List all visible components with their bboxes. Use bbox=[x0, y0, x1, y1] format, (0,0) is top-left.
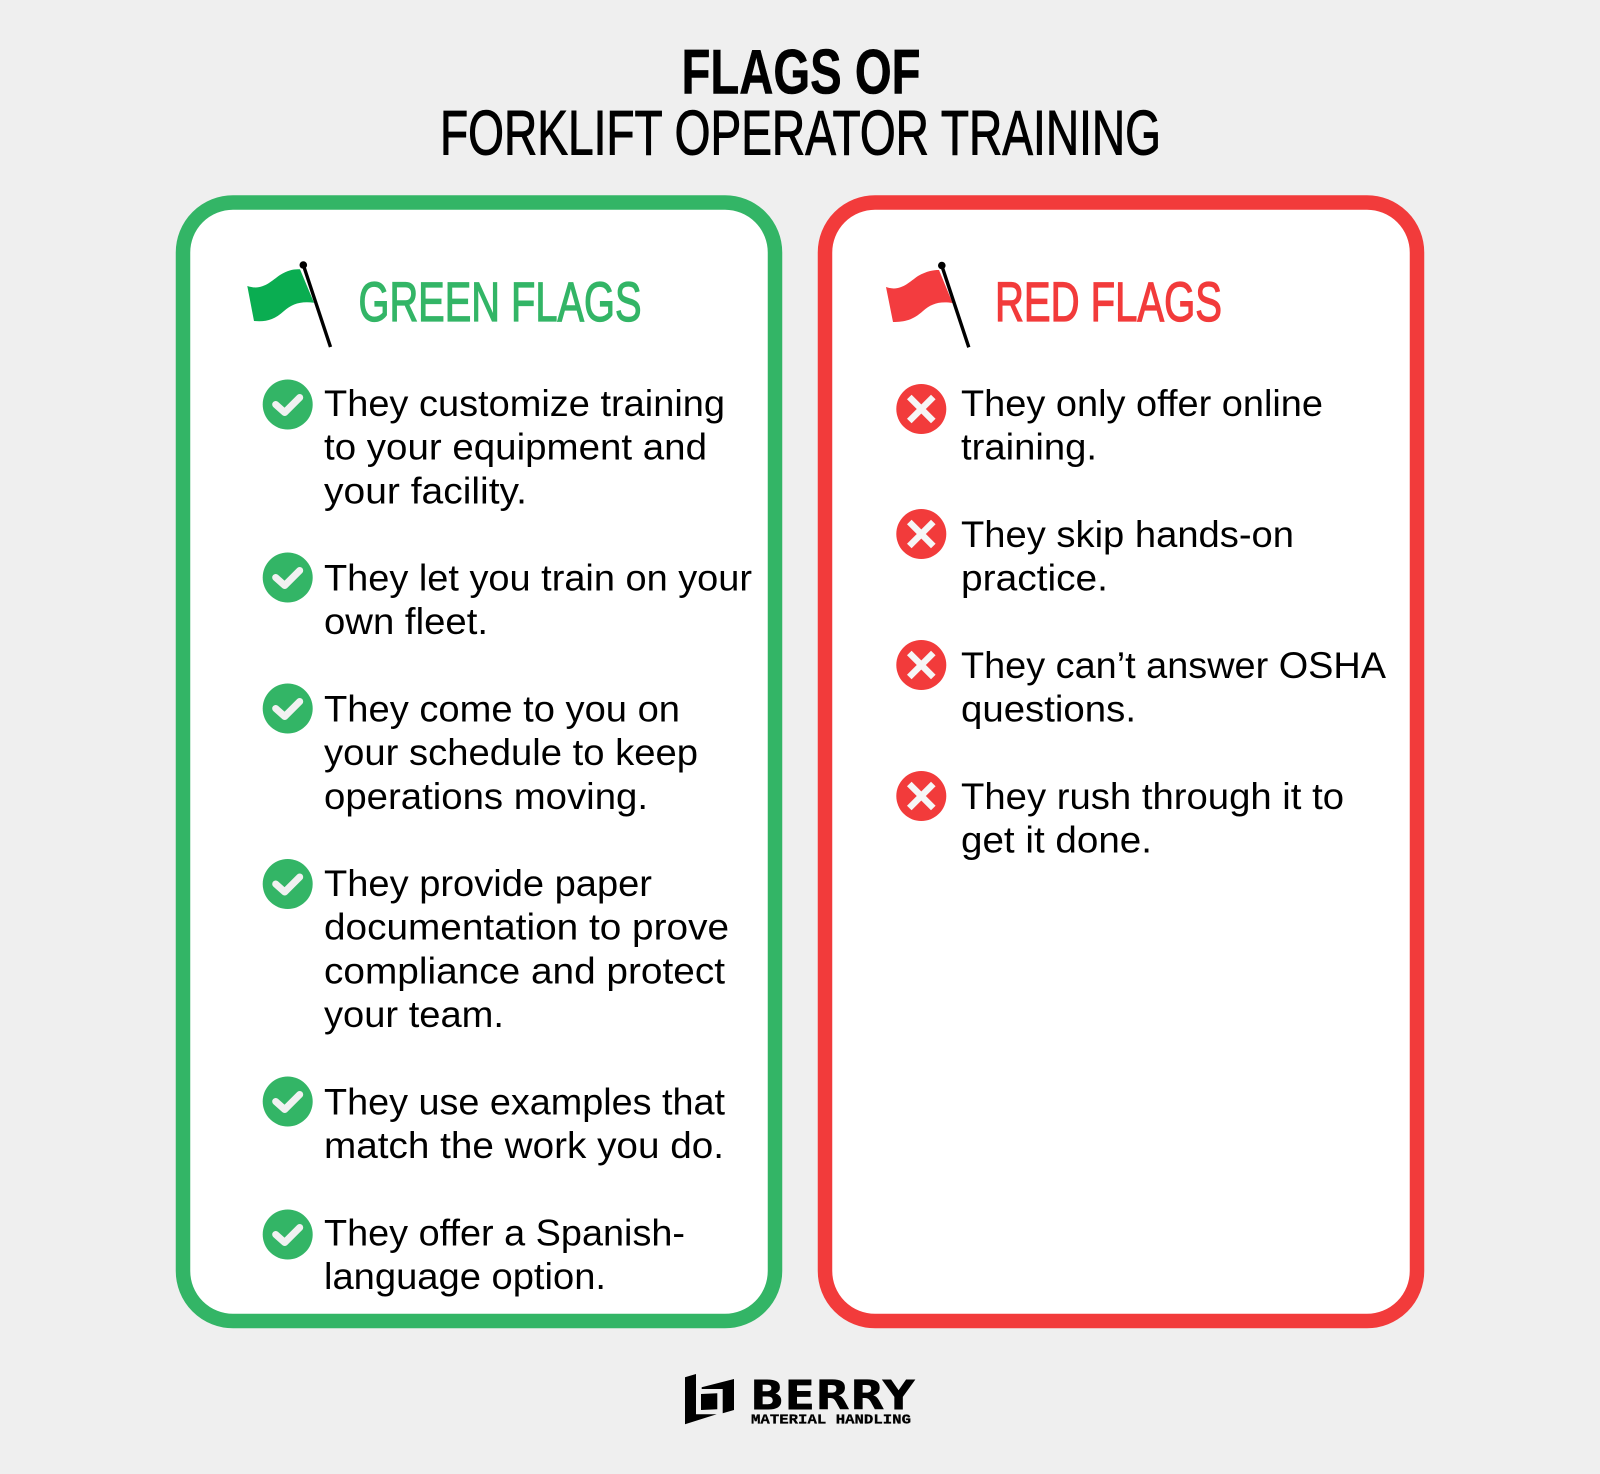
item: on your schedule bbox=[263, 684, 698, 817]
item: on your schedule: your schedule to keep bbox=[324, 732, 698, 773]
logo: Berry Material Handling: BERRY bbox=[750, 1371, 916, 1419]
panel: green flags bbox=[183, 202, 775, 1321]
item: hands-on: They skip hands-on bbox=[961, 514, 1294, 555]
item: spanish bbox=[263, 1210, 685, 1297]
item: own fleet: They let you train on your bbox=[324, 558, 752, 599]
item: on your schedule: operations moving. bbox=[324, 776, 648, 817]
heading: green flags: GREEN FLAGS bbox=[358, 270, 642, 333]
item: rush: get it done. bbox=[961, 820, 1152, 860]
item: examples: They use examples that bbox=[324, 1081, 726, 1122]
item: OSHA: questions. bbox=[961, 688, 1136, 730]
item: online training: training. bbox=[961, 427, 1097, 468]
logo: Berry Material Handling: MATERIAL HANDLING bbox=[751, 1412, 911, 1428]
item: OSHA bbox=[896, 640, 1386, 730]
icon: green flag bbox=[247, 261, 330, 347]
item: online training: They only offer online bbox=[961, 383, 1323, 424]
title: FLAGS OF bbox=[682, 38, 920, 108]
logo: Berry Material Handling bbox=[685, 1371, 916, 1428]
item: rush: They rush through it to bbox=[961, 776, 1344, 817]
icon: logo mark bbox=[685, 1374, 734, 1424]
item: spanish: language option. bbox=[324, 1256, 606, 1297]
item: customize training: They customize training bbox=[324, 383, 725, 424]
item: paper documentation bbox=[263, 859, 729, 1035]
title: FORKLIFT OPERATOR TRAINING bbox=[440, 98, 1161, 168]
item: OSHA: They can’t answer OSHA bbox=[961, 645, 1386, 686]
item: customize training bbox=[263, 380, 725, 511]
item: customize training: your facility. bbox=[324, 470, 527, 511]
item: spanish: They offer a Spanish- bbox=[324, 1212, 685, 1253]
heading: red flags: RED FLAGS bbox=[995, 270, 1222, 333]
item: paper documentation: They provide paper bbox=[324, 863, 652, 904]
item: examples bbox=[263, 1076, 726, 1166]
item: rush bbox=[896, 771, 1344, 860]
panel: red flags bbox=[825, 202, 1417, 1321]
item: on your schedule: They come to you on bbox=[324, 688, 680, 730]
icon: red flag bbox=[886, 262, 969, 347]
item: own fleet: own fleet. bbox=[324, 601, 488, 642]
title bbox=[440, 38, 1161, 168]
item: customize training: to your equipment and bbox=[324, 427, 707, 468]
item: paper documentation: compliance and protect bbox=[324, 950, 726, 991]
item: examples: match the work you do. bbox=[324, 1125, 724, 1166]
item: own fleet bbox=[263, 552, 752, 642]
item: hands-on: practice. bbox=[961, 558, 1108, 599]
item: hands-on bbox=[896, 509, 1294, 599]
item: online training bbox=[896, 383, 1323, 468]
item: paper documentation: your team. bbox=[324, 994, 504, 1035]
item: paper documentation: documentation to prove bbox=[324, 907, 729, 948]
